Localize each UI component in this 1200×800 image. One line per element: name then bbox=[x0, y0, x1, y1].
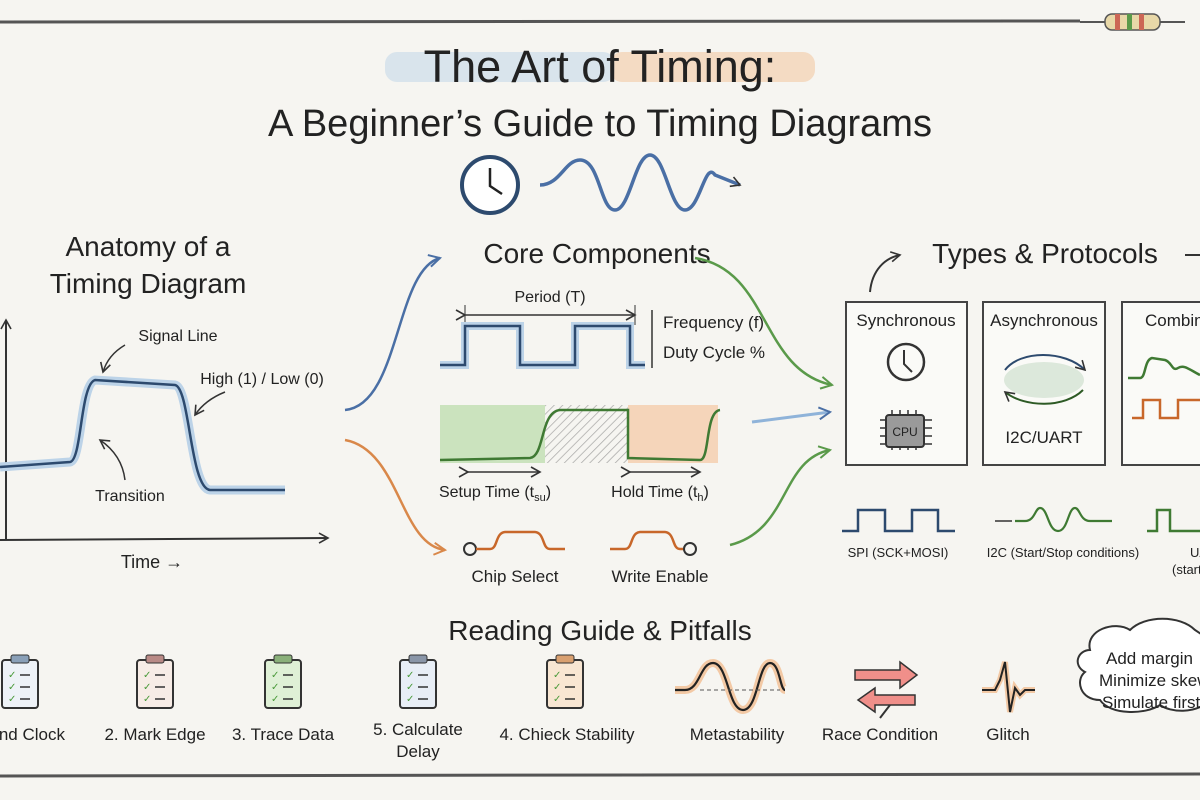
chart: protocol waveforms: SPI (SCK+MOSI) bbox=[848, 545, 948, 560]
heading: reading guide: Reading Guide & Pitfalls bbox=[448, 615, 752, 646]
labels: steps: 3. Trace Data bbox=[232, 725, 335, 744]
icons: clipboards: ✓ bbox=[406, 682, 414, 693]
labels: steps: 4. Chieck Stability bbox=[499, 725, 635, 744]
labels: steps: 5. Calculate bbox=[373, 720, 463, 739]
icon: resistor bbox=[1080, 14, 1185, 30]
heading: types: Types & Protocols bbox=[932, 238, 1158, 269]
labels: steps: Delay bbox=[396, 742, 440, 761]
icons: clipboards: ✓ bbox=[271, 670, 279, 681]
chart: anatomy: Transition bbox=[95, 488, 165, 505]
callout: tips cloud: Add margin bbox=[1106, 649, 1193, 668]
chart: chip select / write enable bbox=[464, 532, 709, 586]
heading: types bbox=[870, 238, 1200, 292]
icons: clipboards: ✓ bbox=[8, 670, 16, 681]
icons: clipboards: ✓ bbox=[143, 694, 151, 705]
chart: setup hold: Hold Time (t bbox=[611, 484, 697, 501]
heading: core components: Core Components bbox=[483, 238, 711, 269]
labels: steps: 2. Mark Edge bbox=[104, 725, 206, 744]
panel: synchronous bbox=[846, 302, 967, 465]
chart: setup hold bbox=[439, 405, 720, 504]
chart: chip select / write enable: Chip Select bbox=[472, 567, 559, 586]
title bbox=[268, 41, 932, 145]
icons: clipboards: ✓ bbox=[143, 670, 151, 681]
chart: protocol waveforms: I2C (Start/Stop conditions) bbox=[987, 545, 1139, 560]
labels: steps bbox=[0, 720, 635, 761]
icons: clipboards: ✓ bbox=[271, 694, 279, 705]
icons: clipboards: ✓ bbox=[143, 682, 151, 693]
chart: clock period: Frequency (f) bbox=[663, 313, 764, 332]
panel: asynchronous: I2C/UART bbox=[1005, 428, 1083, 447]
arrows: left to core bbox=[345, 258, 445, 550]
icon: race condition bbox=[822, 662, 938, 744]
chart: clock period bbox=[440, 289, 765, 368]
chart: clock period: Period (T) bbox=[514, 289, 586, 306]
panel: asynchronous: Asynchronous bbox=[990, 311, 1098, 330]
icons: clipboards: ✓ bbox=[271, 682, 279, 693]
heading: anatomy: Anatomy of a bbox=[66, 231, 231, 262]
panel: synchronous: Synchronous bbox=[856, 311, 956, 330]
panel: synchronous: CPU bbox=[892, 425, 918, 439]
icon: metastability: Metastability bbox=[690, 725, 785, 744]
icon: wave bbox=[540, 155, 740, 210]
callout: tips cloud bbox=[1078, 619, 1200, 712]
title: The Art of Timing: bbox=[424, 41, 776, 92]
chart: anatomy: Time → bbox=[121, 552, 183, 572]
icon: clock bbox=[462, 157, 518, 213]
chart: setup hold: Setup Time (t bbox=[439, 484, 534, 501]
icons: clipboards: ✓ bbox=[553, 682, 561, 693]
chart: chip select / write enable: Write Enable bbox=[611, 567, 709, 586]
chart: setup hold: ) bbox=[704, 484, 709, 501]
icons: clipboards: ✓ bbox=[553, 670, 561, 681]
icon: glitch bbox=[982, 662, 1035, 744]
chart: protocol waveforms bbox=[842, 508, 1200, 577]
icons: clipboards: ✓ bbox=[8, 682, 16, 693]
icons: clipboards: ✓ bbox=[406, 694, 414, 705]
icon: glitch: Glitch bbox=[986, 725, 1030, 744]
chart: setup hold: su bbox=[534, 492, 546, 504]
icons: clipboards: ✓ bbox=[406, 670, 414, 681]
chart: setup hold: ) bbox=[546, 484, 551, 501]
panel: combinational bbox=[1122, 302, 1200, 465]
panel: asynchronous bbox=[983, 302, 1105, 465]
title: A Beginner’s Guide to Timing Diagrams bbox=[268, 103, 932, 145]
icons: clipboards bbox=[2, 655, 583, 708]
icon: race condition: Race Condition bbox=[822, 725, 938, 744]
icon: metastability bbox=[675, 663, 785, 744]
chart: clock period: Duty Cycle % bbox=[663, 343, 765, 362]
chart: setup hold: h bbox=[697, 492, 704, 504]
chart: anatomy bbox=[0, 320, 328, 572]
heading: anatomy: Timing Diagram bbox=[50, 268, 246, 299]
icons: clipboards: ✓ bbox=[8, 694, 16, 705]
arrows: core to types bbox=[695, 258, 832, 545]
chart: anatomy: High (1) / Low (0) bbox=[200, 371, 324, 388]
chart: anatomy: Signal Line bbox=[138, 328, 218, 345]
heading: anatomy bbox=[50, 231, 246, 299]
callout: tips cloud: Simulate first bbox=[1102, 693, 1200, 712]
icons: clipboards: ✓ bbox=[553, 694, 561, 705]
